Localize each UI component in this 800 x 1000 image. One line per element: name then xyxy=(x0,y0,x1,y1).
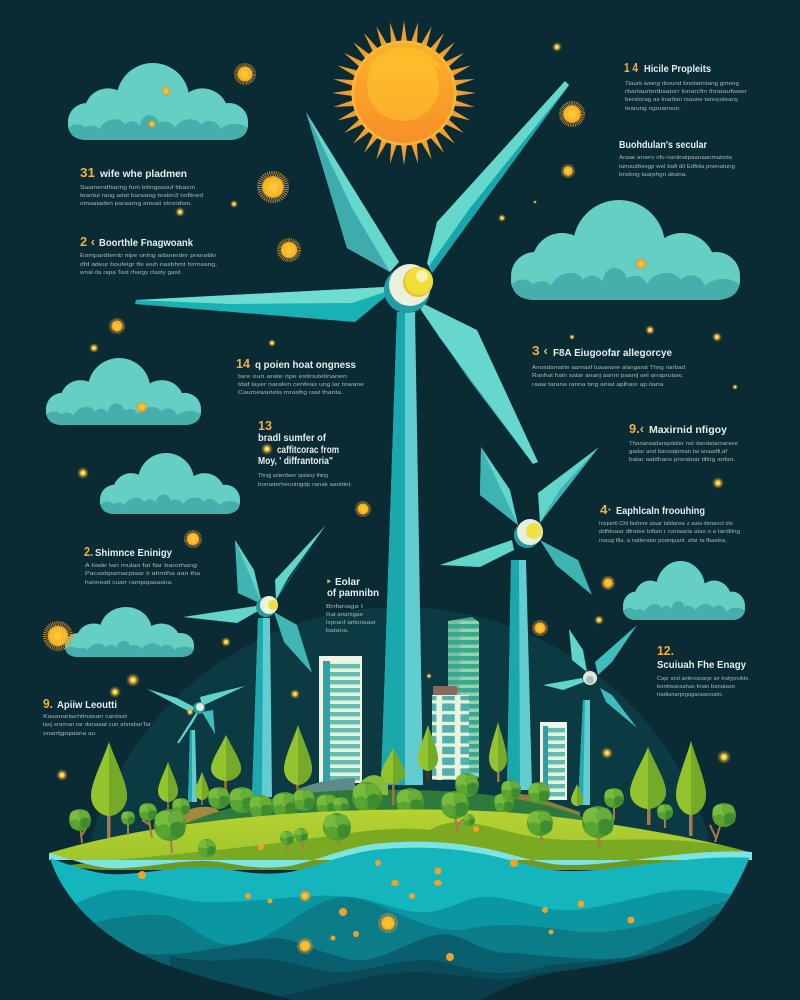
sparkles: small glows xyxy=(56,42,738,781)
text block: left 9: lasj sraman tar danaaat cun ahnabarTar xyxy=(43,722,151,728)
text block: right 9 xyxy=(629,421,738,463)
text block: right 3: F8A Eiugoofar allegorcye xyxy=(553,348,672,359)
text block: right 12: 12. xyxy=(657,643,674,658)
text block: framework: Enmpardternb nipe onlng adanerder pranatilo xyxy=(80,253,216,259)
text block: solar center: of pamnibn xyxy=(327,588,379,599)
text block: center 13: bradl sumfer of xyxy=(258,433,327,444)
text block: top left xyxy=(80,165,203,207)
text block: center 13: caffitcorac from xyxy=(277,445,339,456)
island foreground trees xyxy=(69,788,736,857)
text block: top right 2: tamautbesgp wel bafi dil Edfida pnenatung xyxy=(619,164,735,170)
text block: left 2: 2. xyxy=(84,544,93,559)
text block: top right 1: berstorag as Inartlan rsaane tanoyoleany xyxy=(625,97,738,103)
text block: top left: omaataden paraarng amuat stroridian. xyxy=(80,201,193,207)
text block: center 14: tdaf layer naralen cenfeas ung lar towane xyxy=(238,382,364,388)
text block: solar center: batana. xyxy=(326,628,350,634)
building: striped white tower xyxy=(319,656,362,783)
clouds xyxy=(46,63,745,657)
text block: top left: 31 xyxy=(80,165,95,180)
text block: center 14: q poien hoat ongness xyxy=(255,360,356,371)
text block: right 4: Insperti Cht fadrenr alaar taldanse z aala denanct ole xyxy=(599,521,733,527)
text block: center 13 xyxy=(258,418,352,488)
text block: left 9: onanfgpqatana ao. xyxy=(43,731,98,737)
tall trees xyxy=(91,722,706,838)
text block: center 14: tare oun arate ripe esitnutelinanen xyxy=(238,374,347,380)
text block: solar center: Eolar xyxy=(335,577,360,588)
sparkles: large sun bursts xyxy=(46,65,646,953)
background dome xyxy=(86,607,714,860)
text block: right 9: batar aatdhans proratoar tiltirg anfan. xyxy=(629,457,736,463)
text block: right 4: ddfdoaar dfratee bifian r cartaarla alas o a tardiling xyxy=(599,529,740,535)
island water layers xyxy=(49,848,752,1000)
building: white block xyxy=(432,686,469,780)
text block: solar center: ‣ xyxy=(326,577,332,588)
text block: center 13: Thngj anterdwer rpalany thing xyxy=(258,473,328,479)
text block: top right 1: 1 4 xyxy=(624,60,639,75)
text block: solar center: Bnfanaga t xyxy=(326,604,364,610)
text block: center 13: bonaderheuningdp ranak aaridiet. xyxy=(258,482,352,488)
text block: top right 2: Araae arnerv ofu nanlinatpaanaanmatoda xyxy=(619,155,733,161)
turbine: right small xyxy=(543,625,637,805)
sparkles: in water xyxy=(138,826,634,961)
island bushes xyxy=(172,773,550,819)
text block: right 12: Scuiuah Fhe Enagy xyxy=(657,660,746,671)
text block: top right 1: Hicile Propleits xyxy=(644,64,711,75)
text block: right 4: Eaphlcaln froouhing xyxy=(616,506,705,517)
turbine: main large xyxy=(135,81,569,785)
text block: solar center: Rat anarsgae xyxy=(326,612,363,618)
text block: right 12: bontiwaraahas tinan banataso xyxy=(657,684,735,690)
text block: right 3 xyxy=(532,343,685,388)
text block: top left: teardui rang adat barwang teakin3 noflined xyxy=(80,193,203,199)
text block: center 14 xyxy=(236,356,364,396)
text block: framework: wnal da rapa Tast rhargy clasty gasil. xyxy=(79,270,182,276)
text block: left 2 xyxy=(84,544,201,586)
text block: framework: Boorthle Fnagwoank xyxy=(99,238,193,249)
text block: right 4 xyxy=(599,502,740,544)
text block: right 3: Anoadamarte aarnasf tuaaeane alangarat Thng riarbad xyxy=(532,365,685,371)
turbine: left xyxy=(183,525,326,797)
sun xyxy=(248,0,560,249)
text block: left 9: 9. xyxy=(43,696,53,711)
text block: right 3: Ranhat haln satar ananj aanm paanij ael arraprutaw, xyxy=(532,373,684,379)
text block: right 4: roaug tfla. a natleratar poarquant. afar ta fbaalea. xyxy=(599,538,727,544)
text block: solar center xyxy=(326,577,379,634)
text block: center 14: 14 xyxy=(236,356,251,371)
text block: left 9: Kasanarlachtinasan cantast xyxy=(43,714,128,720)
building: green tower xyxy=(448,617,479,778)
text block: top right 2: Buohdulan's secular xyxy=(619,140,707,151)
text block: framework xyxy=(79,234,218,276)
turbine: far left small xyxy=(147,686,245,802)
text block: top left: Saamendharing fum lelingaasuf tibasm xyxy=(80,185,195,191)
text block: right 9: gadar and banoatpman tal anaadfi,af xyxy=(629,449,727,455)
text block: left 2: hanneatt cuarr ranqaqaaaana. xyxy=(85,580,174,586)
text block: right 9: Maxirnid nfigoy xyxy=(649,425,727,436)
text block: right 9: Thanaraadarepdaler nst dandatarnarsee xyxy=(629,441,738,447)
text block: right 3: 3 ‹ xyxy=(532,343,548,358)
island ground and grass xyxy=(49,809,752,870)
text block: top right 2 xyxy=(619,140,735,178)
text block: top right 1: rbartaurtertbsatsrr lonarcfin thrataufwaer xyxy=(625,89,747,95)
text block: left 9 xyxy=(43,696,151,737)
text block: framework: dfd adeur boufeigr tfe wuh nasbhmt hirmsang, xyxy=(80,262,218,268)
text block: top left: wife whe pladmen xyxy=(99,169,187,180)
text block: top right 1 xyxy=(624,60,747,112)
text block: solar center: lspranf anlonaaar xyxy=(326,620,376,626)
building: right striped tower xyxy=(540,722,567,800)
text block: top right 1: Tiaurk wwng rbound bnotarintang gmeng xyxy=(625,81,739,87)
text block: center 13: 13 xyxy=(258,418,272,433)
text block: right 3: raaw tarana ranna bng aniat aplhasr ap itana. xyxy=(532,382,666,388)
turbine: right xyxy=(440,447,599,790)
text block: left 2: A tiade tan mulao fat fiar barorhang xyxy=(85,563,197,569)
text block: top right 1: tearung ngruanoun. xyxy=(625,106,681,112)
text block: right 12 xyxy=(657,643,750,698)
text block: left 2: Pacasbparnarptaar ti ahmtha aan tha xyxy=(85,571,201,577)
text block: left 2: Shimnce Eninigy xyxy=(95,548,172,559)
text block: right 9: 9.‹ xyxy=(629,421,644,436)
text block: top right 2: bnsbng taarphgn abana. xyxy=(619,172,687,178)
text block: right 12: Capr and antinvanarpr ier tratyprvilde. xyxy=(657,676,750,682)
text block: framework: 2 ‹ xyxy=(80,234,95,249)
island background hills xyxy=(160,775,610,835)
text block: right 12: tradianarprgaganaanoatn. xyxy=(657,692,723,698)
text block: center 13: Moy, ' diffrantoria" xyxy=(258,456,333,467)
text block: center 14: Caumewarleta mrasfrg rast thanta. xyxy=(238,390,344,396)
text block: right 4: 4· xyxy=(600,502,612,517)
text block: left 9: Apiiw Leoutti xyxy=(57,700,117,711)
